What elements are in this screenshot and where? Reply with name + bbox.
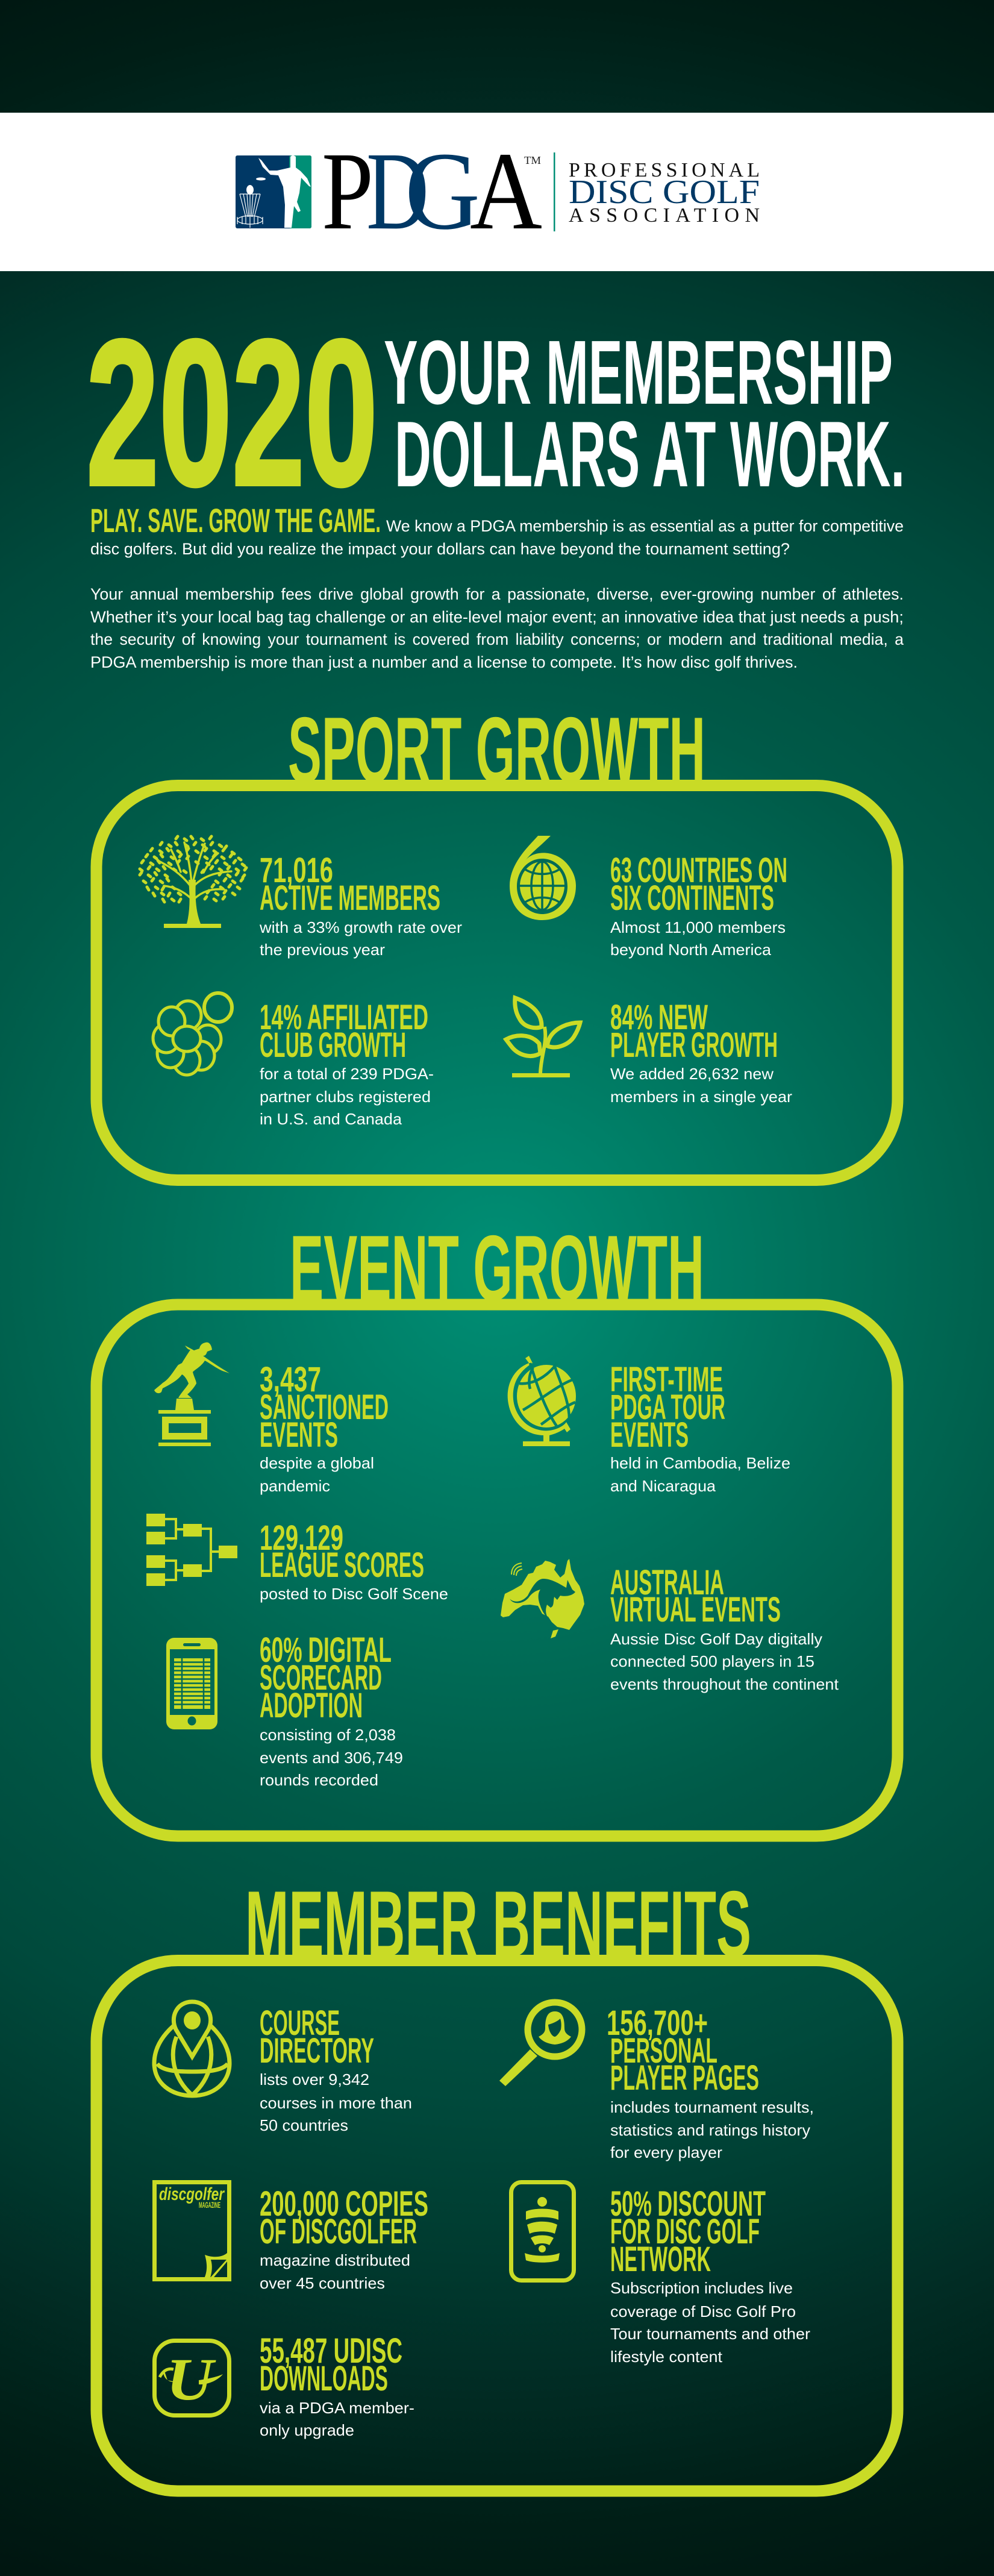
stat: sanctioned events: despite a global	[260, 1454, 374, 1472]
title: 2020	[86, 297, 378, 528]
stat: course directory: lists over 9,342	[260, 2070, 369, 2089]
stat: league scores	[260, 1518, 448, 1603]
header band with PDGA logo	[0, 113, 994, 271]
stat: club growth	[260, 998, 434, 1128]
stat: digital scorecard	[260, 1631, 403, 1789]
stat: australia virtual events	[610, 1563, 839, 1693]
stat: countries: 63 COUNTRIES ON	[610, 851, 787, 890]
stat: digital scorecard: rounds recorded	[260, 1771, 378, 1789]
stat: course directory: courses in more than	[260, 2094, 412, 2112]
logo wordmark: PDGA: P	[322, 130, 374, 253]
intro text block	[90, 501, 904, 671]
stat: course directory: COURSE	[260, 2004, 340, 2043]
stat: club growth: in U.S. and Canada	[260, 1110, 402, 1128]
intro text block: PLAY. SAVE. GROW THE GAME.	[90, 501, 381, 539]
stat: sanctioned events: 3,437	[260, 1360, 321, 1399]
intro text block: Your annual membership fees drive global growth for a passionate, diverse, ever-growing number of athletes.	[90, 585, 904, 603]
intro text block: Whether it’s your local bag tag challenge or an elite-level major event; an innovative idea that just needs a push;	[90, 608, 904, 626]
stat: countries	[610, 851, 787, 959]
stat: personal player pages: PLAYER PAGES	[610, 2058, 759, 2098]
icon: disc golfer trophy	[154, 1343, 230, 1446]
stat: australia virtual events: VIRTUAL EVENTS	[610, 1590, 781, 1629]
icon: discgolfer magazine	[154, 2183, 229, 2281]
intro text block: We know a PDGA membership is as essential as a putter for competitive	[386, 517, 904, 535]
stat: australia virtual events: Aussie Disc Golf Day digitally	[610, 1630, 822, 1648]
stat: new player growth: 84% NEW	[610, 998, 708, 1037]
stat: sanctioned events: pandemic	[260, 1477, 330, 1495]
stat: personal player pages: includes tournament results,	[610, 2098, 814, 2116]
stat: club growth: CLUB GROWTH	[260, 1026, 406, 1065]
stat: personal player pages: PERSONAL	[610, 2031, 717, 2070]
stat: active members: ACTIVE MEMBERS	[260, 879, 440, 918]
icon: discgolfer magazine: discgolfer	[159, 2184, 225, 2204]
stat: personal player pages	[607, 2004, 814, 2161]
icon: tree	[140, 836, 246, 928]
title	[86, 297, 905, 528]
intro text block: the security of knowing your tournament is covered from liability concerns; or modern and traditional media, a	[90, 630, 904, 648]
stat: course directory	[260, 2004, 412, 2134]
stat: club growth: for a total of 239 PDGA-	[260, 1065, 434, 1083]
stat: countries: SIX CONTINENTS	[610, 879, 774, 918]
icon: australia with kangaroo	[501, 1559, 584, 1638]
stat: disc golf network: NETWORK	[610, 2240, 711, 2279]
stat: digital scorecard: events and 306,749	[260, 1749, 403, 1767]
stat: sanctioned events: EVENTS	[260, 1415, 338, 1455]
logo text: Professional Disc Golf Association	[569, 159, 760, 227]
stat: udisc downloads	[260, 2331, 414, 2439]
stat: digital scorecard: ADOPTION	[260, 1686, 363, 1725]
stat: disc golf network: Tour tournaments and other	[610, 2325, 810, 2343]
stat: countries: Almost 11,000 members	[610, 918, 786, 936]
logo wordmark: PDGA: TM	[524, 154, 541, 166]
icon: globe on stand	[508, 1356, 576, 1446]
stat: first-time tour events	[610, 1360, 790, 1495]
icon: club circles	[153, 993, 232, 1075]
stat: discgolfer copies: magazine distributed	[260, 2251, 410, 2269]
stat: sanctioned events: SANCTIONED	[260, 1388, 389, 1427]
stat: first-time tour events: FIRST-TIME	[610, 1360, 723, 1399]
stat: udisc downloads: via a PDGA member-	[260, 2399, 414, 2417]
icon: phone scorecard	[166, 1638, 217, 1729]
stat: club growth: partner clubs registered	[260, 1088, 431, 1106]
stat: new player growth: PLAYER GROWTH	[610, 1026, 778, 1065]
stat: course directory: 50 countries	[260, 2116, 348, 2134]
stat: league scores: 129,129	[260, 1518, 343, 1558]
stat: first-time tour events: and Nicaragua	[610, 1477, 716, 1495]
logo wordmark: PDGA: D	[366, 130, 429, 253]
stat: personal player pages: 156,700+	[607, 2004, 708, 2043]
logo text: Professional Disc Golf Association: DISC GOLF	[569, 174, 760, 211]
stat: new player growth	[610, 998, 792, 1106]
icon: location pin on globe	[154, 2002, 230, 2096]
icon: discgolfer magazine: MAGAZINE	[199, 2200, 220, 2210]
intro text block: disc golfers. But did you realize the impact your dollars can have beyond the tournament setting?	[90, 540, 790, 558]
stat: active members: with a 33% growth rate over	[259, 918, 462, 936]
stat: course directory: DIRECTORY	[260, 2031, 374, 2070]
stat: first-time tour events: PDGA TOUR	[610, 1388, 725, 1427]
stat: personal player pages: for every player	[610, 2143, 722, 2161]
logo wordmark: PDGA: A	[470, 130, 542, 253]
stat: active members: 71,016	[260, 851, 333, 890]
logo text: Professional Disc Golf Association: ASSOCIATION	[569, 204, 760, 227]
stat: disc golf network: Subscription includes live	[610, 2279, 793, 2297]
stat: sanctioned events	[260, 1360, 389, 1495]
stat: league scores: posted to Disc Golf Scene	[260, 1585, 448, 1603]
icon: sprout	[506, 998, 580, 1077]
stat: personal player pages: statistics and ratings history	[610, 2121, 810, 2139]
stat: australia virtual events: AUSTRALIA	[610, 1563, 724, 1602]
stat: udisc downloads: only upgrade	[260, 2421, 354, 2439]
icon: six with globe	[510, 836, 576, 920]
icon: disc golf network	[511, 2183, 574, 2280]
stat: australia virtual events: connected 500 players in 15	[610, 1652, 814, 1670]
stat: udisc downloads: 55,487 UDISC	[260, 2331, 402, 2371]
stat: discgolfer copies	[260, 2184, 428, 2292]
stat: active members	[259, 851, 462, 959]
icon: league bracket	[146, 1514, 237, 1586]
logo text: Professional Disc Golf Association: PROFESSIONAL	[569, 159, 760, 181]
stat: discgolfer copies: over 45 countries	[260, 2274, 385, 2292]
stat: first-time tour events: held in Cambodia, Belize	[610, 1454, 790, 1472]
stat: disc golf network: 50% DISCOUNT	[610, 2184, 766, 2223]
panel: member benefits	[96, 1872, 898, 2491]
icon: magnifier with player	[499, 2002, 582, 2086]
stat: udisc downloads: DOWNLOADS	[260, 2359, 388, 2398]
icon: udisc	[154, 2340, 229, 2415]
stat: league scores: LEAGUE SCORES	[260, 1546, 424, 1585]
stat: disc golf network: FOR DISC GOLF	[610, 2212, 760, 2251]
stat: discgolfer copies: OF DISCGOLFER	[260, 2212, 417, 2251]
logo wordmark: PDGA	[322, 130, 542, 253]
stat: digital scorecard: SCORECARD	[260, 1658, 382, 1697]
stat: disc golf network: coverage of Disc Golf Pro	[610, 2302, 796, 2321]
stat: digital scorecard: consisting of 2,038	[260, 1726, 396, 1744]
stat: australia virtual events: events throughout the continent	[610, 1675, 839, 1693]
stat: new player growth: We added 26,632 new	[610, 1065, 774, 1083]
logo wordmark: PDGA: G	[405, 130, 480, 253]
icon: udisc: U	[166, 2346, 216, 2413]
panel: event growth	[96, 1216, 898, 1836]
stat: disc golf network	[610, 2184, 810, 2366]
stat: new player growth: members in a single year	[610, 1088, 792, 1106]
stat: active members: the previous year	[260, 941, 385, 959]
intro text block: PDGA membership is more than just a number and a license to compete. It’s how disc golf thrives.	[90, 653, 798, 671]
logo icon: disc golfer and basket	[236, 155, 311, 228]
stat: first-time tour events: EVENTS	[610, 1415, 689, 1455]
stat: club growth: 14% AFFILIATED	[260, 998, 428, 1037]
stat: discgolfer copies: 200,000 COPIES	[260, 2184, 428, 2223]
stat: digital scorecard: 60% DIGITAL	[260, 1631, 392, 1670]
stat: countries: beyond North America	[610, 941, 772, 959]
stat: disc golf network: lifestyle content	[610, 2348, 723, 2366]
panel: sport growth	[96, 698, 898, 1180]
